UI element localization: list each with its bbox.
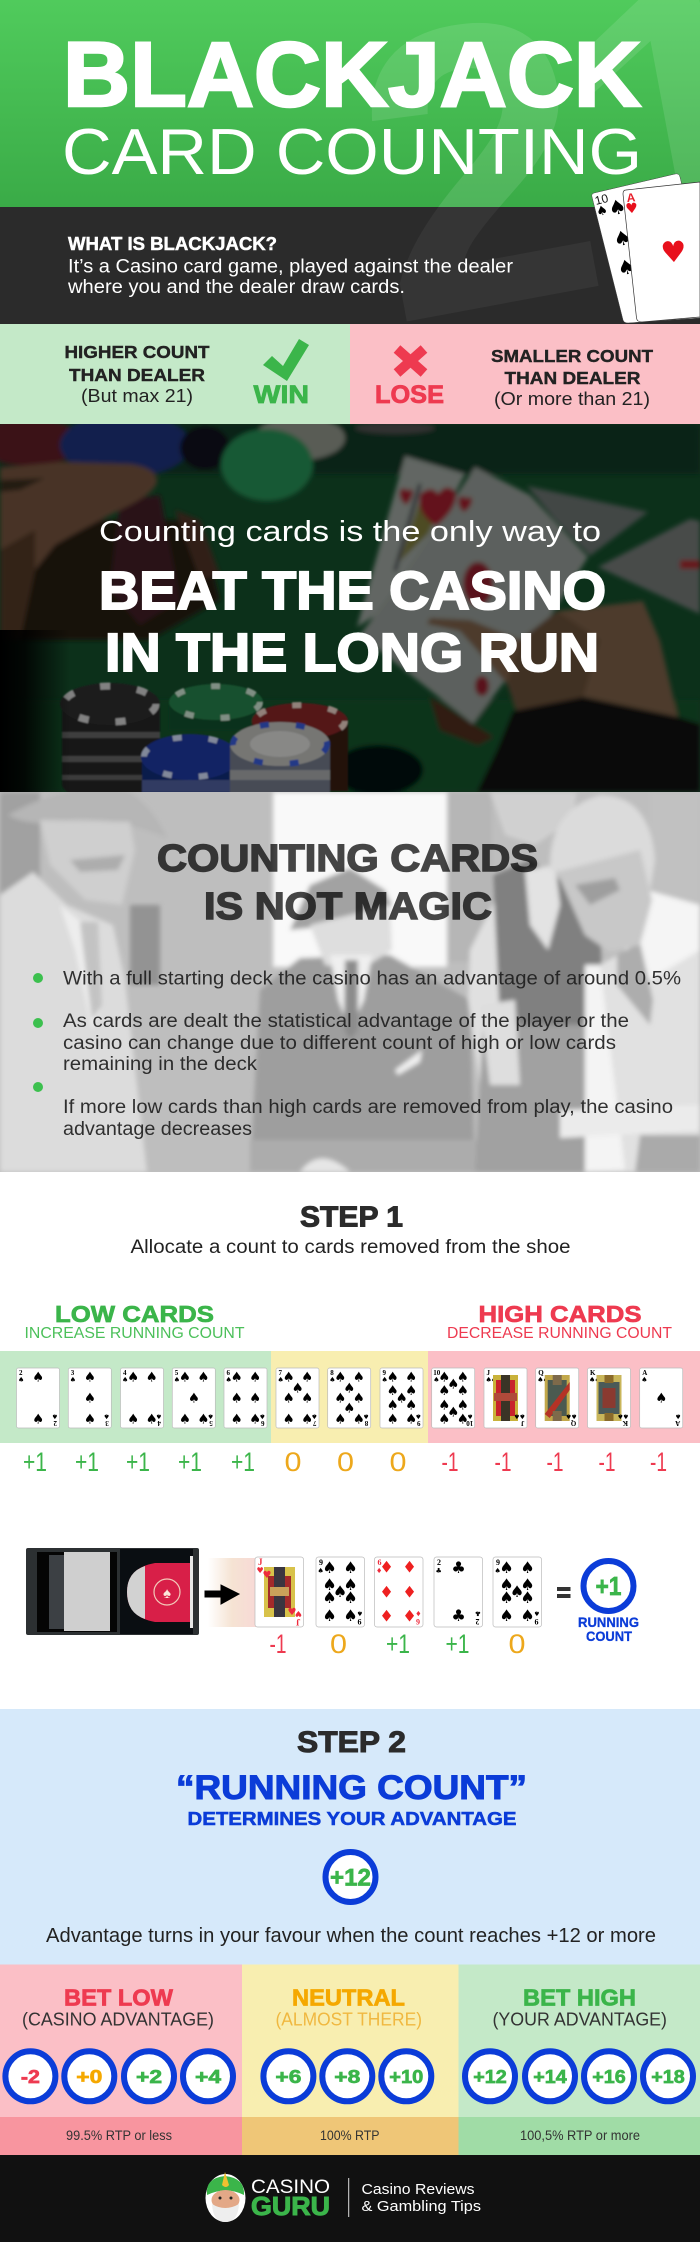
- card: 8 of spades: 8: [364, 1419, 368, 1427]
- card: queen of spades: ♠: [543, 1376, 549, 1384]
- back man: [490, 792, 577, 845]
- card: 9 of spades: 9: [358, 1617, 362, 1626]
- card: 10 of spades: 10: [433, 1369, 441, 1377]
- bullet text 2: remaining in the deck: [63, 1054, 258, 1075]
- card: 2 of spades: 2: [19, 1369, 23, 1377]
- rtp: bet high: 100,5% RTP or more: [520, 2128, 640, 2143]
- front man: [598, 950, 700, 1172]
- column: neutral: [242, 1964, 458, 2155]
- running count label: [578, 1614, 639, 1644]
- bullet text 3: advantage decreases: [63, 1119, 252, 1140]
- high cards heading: [447, 1301, 673, 1342]
- card: ace of spades: A: [642, 1369, 647, 1377]
- card: 2 of spades: ♠: [52, 1412, 58, 1420]
- card: queen of spades: ♠: [571, 1412, 577, 1420]
- logo wordmark: [251, 2176, 330, 2221]
- rtp: bet low: 99.5% RTP or less: [66, 2128, 172, 2143]
- chip stack: black: [60, 683, 160, 802]
- title: card counting: CARD COUNTING: [62, 115, 642, 188]
- card: 4 of spades: 4: [123, 1369, 127, 1377]
- example count values: +1: [446, 1629, 470, 1659]
- badges: +12: [473, 2066, 507, 2087]
- what is blackjack text: It’s a Casino card game, played against the dealer: [68, 256, 514, 278]
- badges: +8: [334, 2066, 360, 2087]
- neutral heading: NEUTRAL: [292, 1984, 405, 2010]
- card: 5 of spades: ♠: [208, 1412, 214, 1420]
- running count label: RUNNING: [578, 1614, 639, 1630]
- card: 4 of spades: ♠: [156, 1412, 162, 1420]
- card count values: 0: [337, 1447, 354, 1477]
- card: 6 of diamonds: ♦♦♦♦♦♦: [379, 1558, 417, 1626]
- card: 7 of spades: [276, 1368, 319, 1428]
- card: 9 of spades: 9: [534, 1617, 538, 1626]
- card: 9 of spades: ♠♠♠♠♠♠♠♠♠: [386, 1370, 417, 1428]
- card: 6 of spades: ♠: [259, 1412, 266, 1420]
- card: ace of spades: ♠: [675, 1412, 681, 1420]
- what is blackjack text: WHAT IS BLACKJACK?: [68, 233, 277, 254]
- card: jack of spades: J: [520, 1419, 524, 1427]
- lose conditions text: (Or more than 21): [494, 389, 650, 409]
- icon: playing cards: ♠: [611, 224, 634, 252]
- card: 9 of spades: [493, 1557, 542, 1627]
- win conditions text: HIGHER COUNT: [64, 342, 210, 362]
- card: 2 of clubs: ♣: [436, 1567, 442, 1575]
- left man: [0, 872, 147, 1172]
- card: 9 of spades: ♠: [357, 1609, 363, 1617]
- card: 4 of spades: ♠♠♠♠: [127, 1370, 158, 1428]
- badges: +16: [592, 2066, 626, 2087]
- low cards heading: [24, 1301, 245, 1342]
- +12 badge: [326, 1852, 376, 1902]
- bullet point 3: [33, 1082, 43, 1092]
- card: 10 of spades: [432, 1368, 475, 1428]
- high cards heading: HIGH CARDS: [478, 1301, 642, 1327]
- bet low heading: BET LOW: [64, 1984, 173, 2010]
- chip stack: red: [252, 703, 348, 791]
- card: 2 of spades: ♠♠: [32, 1370, 44, 1428]
- card: 2 of spades: [16, 1368, 60, 1428]
- photo illustration: table, hands and cards: [0, 413, 700, 795]
- card: 8 of spades: ♠: [329, 1376, 335, 1384]
- card: 10 of spades: 10: [466, 1419, 473, 1427]
- card: 3 of spades: ♠♠♠: [84, 1370, 96, 1428]
- icon: check mark: [263, 339, 309, 381]
- card: king of spades: ♠: [589, 1376, 595, 1384]
- heading: counting cards is not magic: COUNTING CARDS: [157, 838, 538, 880]
- icon: cross: [397, 349, 424, 373]
- photo illustration: four men in grayscale: [0, 789, 700, 1172]
- badges: [465, 2051, 693, 2101]
- zone bands: [0, 1351, 700, 1443]
- badges: +6: [275, 2066, 301, 2087]
- card: 4 of spades: 4: [157, 1419, 161, 1427]
- footer tagline: & Gambling Tips: [362, 2198, 481, 2215]
- +12 badge: +12: [330, 1864, 371, 1892]
- card: 5 of spades: ♠: [174, 1376, 180, 1384]
- card count values: [23, 1447, 667, 1477]
- card: queen of spades: ♠: [565, 1412, 572, 1420]
- card: 6 of spades: [224, 1368, 267, 1428]
- card: 9 of spades: 9: [319, 1558, 323, 1567]
- card: 2 of clubs: ♣: [475, 1609, 481, 1617]
- win label: WIN: [254, 381, 309, 409]
- card: queen of spades: Q: [570, 1419, 576, 1427]
- card: 7 of spades: 7: [278, 1369, 282, 1377]
- card: jack of spades: ♠: [486, 1376, 492, 1384]
- card: 9 of spades: ♠: [382, 1376, 388, 1384]
- card: 7 of spades: 7: [312, 1419, 316, 1427]
- card: 5 of spades: 5: [175, 1369, 179, 1377]
- chip stack: blue: [140, 733, 231, 792]
- card count values: -1: [442, 1447, 458, 1477]
- card: queen of spades: ♠: [537, 1376, 543, 1384]
- icon: playing cards: ♥: [625, 200, 639, 218]
- slogan headline: in the long run: IN THE LONG RUN: [105, 623, 599, 683]
- card: 6 of diamonds: ♦: [415, 1609, 422, 1617]
- panel: poker table photo: [0, 413, 700, 802]
- win panel: [0, 324, 350, 424]
- badges: -2: [21, 2066, 40, 2087]
- card: 9 of spades: 9: [416, 1419, 420, 1427]
- panel: step 1: [0, 1202, 700, 1477]
- card: jack of spades: J: [486, 1369, 490, 1377]
- icon: playing cards: A: [626, 190, 636, 205]
- example count values: 0: [508, 1629, 526, 1659]
- icon: card shoe: [26, 1548, 199, 1635]
- badges: [5, 2051, 233, 2101]
- win conditions text: THAN DEALER: [69, 365, 205, 385]
- card: 6 of diamonds: 6: [378, 1558, 382, 1567]
- example count values: [270, 1629, 526, 1659]
- equals sign: [557, 1587, 570, 1598]
- card: jack of hearts: ♥: [288, 1607, 297, 1618]
- card: 9 of spades: [380, 1368, 423, 1428]
- card: 8 of spades: 8: [330, 1369, 334, 1377]
- card count values: +1: [231, 1447, 255, 1477]
- card: 9 of spades: ♠: [415, 1412, 422, 1420]
- running count heading: “RUNNING COUNT”: [176, 1769, 527, 1807]
- card: 9 of spades: 9: [382, 1369, 386, 1377]
- heading: counting cards is not magic: [158, 844, 538, 920]
- lose label: LOSE: [375, 381, 444, 409]
- step 1 heading: STEP 1: [300, 1202, 403, 1234]
- card: jack of hearts: ♥: [263, 1570, 272, 1581]
- chip stack: white: [230, 722, 330, 794]
- step 1 subtitle: Allocate a count to cards removed from the shoe: [130, 1237, 570, 1258]
- card: 6 of spades: ♠♠♠♠♠♠: [230, 1370, 261, 1428]
- card: ace of spades: ♠: [655, 1390, 667, 1406]
- card: jack of spades: ♠: [491, 1376, 497, 1384]
- bullet text 3: [63, 1097, 673, 1140]
- card: 5 of spades: 5: [209, 1419, 213, 1427]
- card: king of spades: ♠: [594, 1376, 601, 1384]
- determines your advantage: DETERMINES YOUR ADVANTAGE: [188, 1809, 516, 1829]
- card: 9 of spades: [316, 1557, 364, 1627]
- bullet text 2: casino can change due to different count of high or low cards: [63, 1033, 616, 1054]
- badges: +14: [533, 2066, 567, 2087]
- bullet text 2: As cards are dealt the statistical advantage of the player or the: [63, 1011, 629, 1032]
- bullet list: [33, 968, 681, 1140]
- chip stack: green: [169, 684, 263, 730]
- running count label: COUNT: [586, 1628, 632, 1644]
- badges: +18: [651, 2066, 685, 2087]
- middle man: [250, 952, 476, 1142]
- advantage explanation: Advantage turns in your favour when the count reaches +12 or more: [46, 1925, 656, 1947]
- card: 5 of spades: ♠♠♠♠♠: [179, 1370, 209, 1428]
- card: 7 of spades: ♠: [278, 1376, 284, 1384]
- card: 6 of diamonds: ♦: [376, 1567, 382, 1575]
- card row: [16, 1368, 683, 1428]
- card: 2 of spades: ♠: [18, 1376, 24, 1384]
- card: 6 of spades: ♠: [226, 1376, 232, 1384]
- card: 6 of spades: 6: [226, 1369, 230, 1377]
- card: 2 of spades: 2: [53, 1419, 57, 1427]
- icon: playing cards: [592, 174, 700, 323]
- rtp: neutral: 100% RTP: [320, 2128, 380, 2143]
- logo wordmark: CASINO: [251, 2176, 330, 2198]
- bullet text 2: [63, 1011, 629, 1075]
- card: 9 of spades: ♠: [494, 1567, 501, 1575]
- card: 2 of clubs: ♣♣: [451, 1558, 466, 1625]
- card: 8 of spades: [328, 1368, 371, 1428]
- card: 8 of spades: ♠: [363, 1412, 369, 1420]
- running count badge: [584, 1561, 634, 1611]
- card: ace of spades: [640, 1368, 683, 1428]
- card: 2 of clubs: 2: [476, 1617, 480, 1626]
- badges: +4: [195, 2066, 222, 2087]
- card count values: +1: [23, 1447, 47, 1477]
- card: 2 of clubs: 2: [437, 1558, 441, 1567]
- card: king of spades: K: [622, 1419, 628, 1427]
- panel: step 2: [0, 1709, 700, 1965]
- column: bet low: [0, 1964, 242, 2155]
- card: 3 of spades: [68, 1368, 111, 1428]
- card: king of spades: ♠: [623, 1412, 629, 1420]
- card: 9 of spades: ♠♠♠♠♠♠♠♠♠: [322, 1558, 358, 1625]
- running count badge: +1: [596, 1571, 622, 1601]
- card: 6 of diamonds: 6: [416, 1617, 420, 1626]
- title: blackjack: BLACKJACK: [63, 24, 641, 126]
- footer tagline: Casino Reviews: [362, 2181, 474, 2198]
- what is blackjack text: where you and the dealer draw cards.: [67, 277, 405, 298]
- card: 3 of spades: 3: [71, 1369, 75, 1377]
- card: ace of spades: A: [675, 1419, 680, 1427]
- bullet point 1: [33, 973, 43, 983]
- card: jack of spades: [484, 1368, 527, 1428]
- card: 9 of spades: ♠: [534, 1609, 540, 1617]
- card: 3 of spades: ♠: [104, 1412, 110, 1420]
- card: 10 of spades: ♠: [467, 1412, 473, 1420]
- example count values: 0: [330, 1629, 347, 1659]
- card motion blur: [208, 1558, 256, 1627]
- bullet point 2: [33, 1018, 43, 1028]
- icon: playing cards: ♠: [595, 203, 610, 220]
- card: jack of hearts: J: [296, 1617, 300, 1627]
- heading: counting cards is not magic: IS NOT MAGIC: [204, 886, 492, 928]
- column: bet high: [458, 1964, 700, 2155]
- casino advantage: (CASINO ADVANTAGE): [22, 2010, 214, 2030]
- card: jack of spades: ♠: [514, 1412, 520, 1420]
- your advantage: (YOUR ADVANTAGE): [492, 2010, 667, 2030]
- slogan line: Counting cards is the only way to: [99, 516, 601, 548]
- icon: playing cards: 10: [593, 191, 610, 208]
- card: queen of spades: Q: [538, 1369, 544, 1377]
- card count values: 0: [284, 1447, 302, 1477]
- what is blackjack text: [67, 233, 514, 298]
- lose conditions text: SMALLER COUNT: [491, 346, 653, 366]
- icon: playing cards: ♥: [660, 234, 687, 270]
- logo wordmark: GURU: [251, 2191, 330, 2221]
- card: 7 of spades: ♠♠♠♠♠♠♠: [282, 1370, 313, 1428]
- card: 3 of spades: 3: [105, 1419, 109, 1427]
- card count values: -1: [546, 1447, 564, 1477]
- card count values: +1: [75, 1447, 99, 1477]
- panel: counting cards is not magic: [0, 789, 700, 1172]
- card: 2 of clubs: [434, 1557, 482, 1627]
- card: 10 of spades: ♠: [433, 1376, 439, 1384]
- example: shoe and running count: [26, 1548, 639, 1659]
- lose conditions text: [491, 346, 653, 409]
- card count values: -1: [494, 1447, 512, 1477]
- card count values: -1: [598, 1447, 616, 1477]
- card: 6 of spades: 6: [260, 1419, 264, 1427]
- card: jack of spades: ♠: [519, 1412, 526, 1420]
- card: king of spades: [588, 1368, 630, 1428]
- card: jack of hearts: [255, 1557, 304, 1627]
- win conditions text: (But max 21): [81, 386, 193, 406]
- card: 4 of spades: [120, 1368, 164, 1428]
- footer tagline: [362, 2181, 481, 2215]
- high cards heading: DECREASE RUNNING COUNT: [447, 1325, 673, 1342]
- card: 9 of spades: ♠: [318, 1567, 324, 1575]
- card: 5 of spades: [172, 1368, 215, 1428]
- icon: playing cards: ♠: [606, 193, 629, 221]
- card: jack of hearts: J: [258, 1557, 263, 1567]
- card: 9 of spades: 9: [496, 1558, 500, 1567]
- card: queen of spades: [536, 1368, 579, 1428]
- card count values: -1: [650, 1447, 667, 1477]
- card: 8 of spades: ♠♠♠♠♠♠♠♠: [334, 1370, 365, 1428]
- card count values: +1: [178, 1447, 202, 1477]
- arrow: [205, 1585, 239, 1604]
- example count values: +1: [386, 1629, 410, 1659]
- icon: casino guru mascot: [206, 2172, 246, 2222]
- slogan headline: beat the casino: BEAT THE CASINO: [99, 561, 606, 621]
- badges: [263, 2051, 431, 2101]
- card: 7 of spades: ♠: [311, 1412, 318, 1420]
- card: ace of spades: ♠: [641, 1376, 647, 1384]
- step 2 heading: STEP 2: [297, 1726, 406, 1759]
- lose conditions text: THAN DEALER: [504, 368, 641, 388]
- bet high heading: BET HIGH: [523, 1984, 636, 2010]
- card count values: 0: [390, 1447, 406, 1477]
- badges: +0: [76, 2066, 102, 2087]
- card count values: +1: [126, 1447, 150, 1477]
- footer: [0, 2155, 700, 2242]
- low cards heading: LOW CARDS: [55, 1301, 214, 1327]
- win conditions text: [64, 342, 210, 406]
- card: jack of hearts: ♥: [256, 1566, 264, 1575]
- lose panel: [350, 324, 700, 424]
- card: jack of hearts: ♥: [295, 1609, 302, 1618]
- header panel: [0, 0, 700, 324]
- badges: +10: [389, 2066, 423, 2087]
- low cards heading: INCREASE RUNNING COUNT: [24, 1325, 245, 1342]
- card: king of spades: K: [590, 1369, 596, 1377]
- card: 9 of spades: ♠♠♠♠♠♠♠♠♠: [499, 1558, 535, 1625]
- bullet text 1: With a full starting deck the casino has an advantage of around 0.5%: [63, 968, 681, 990]
- badges: +2: [136, 2066, 162, 2087]
- card: king of spades: ♠: [617, 1412, 624, 1420]
- bullet text 3: If more low cards than high cards are removed from play, the casino: [63, 1097, 673, 1118]
- icon: playing cards: ♠: [615, 253, 638, 281]
- card: 3 of spades: ♠: [70, 1376, 76, 1384]
- card: 10 of spades: ♠♠♠♠♠♠♠♠♠♠: [438, 1370, 469, 1428]
- icon: card shoe: ♠: [163, 1585, 171, 1602]
- example count values: -1: [270, 1629, 286, 1659]
- card: 4 of spades: ♠: [122, 1376, 128, 1384]
- almost there: (ALMOST THERE): [276, 2010, 422, 2030]
